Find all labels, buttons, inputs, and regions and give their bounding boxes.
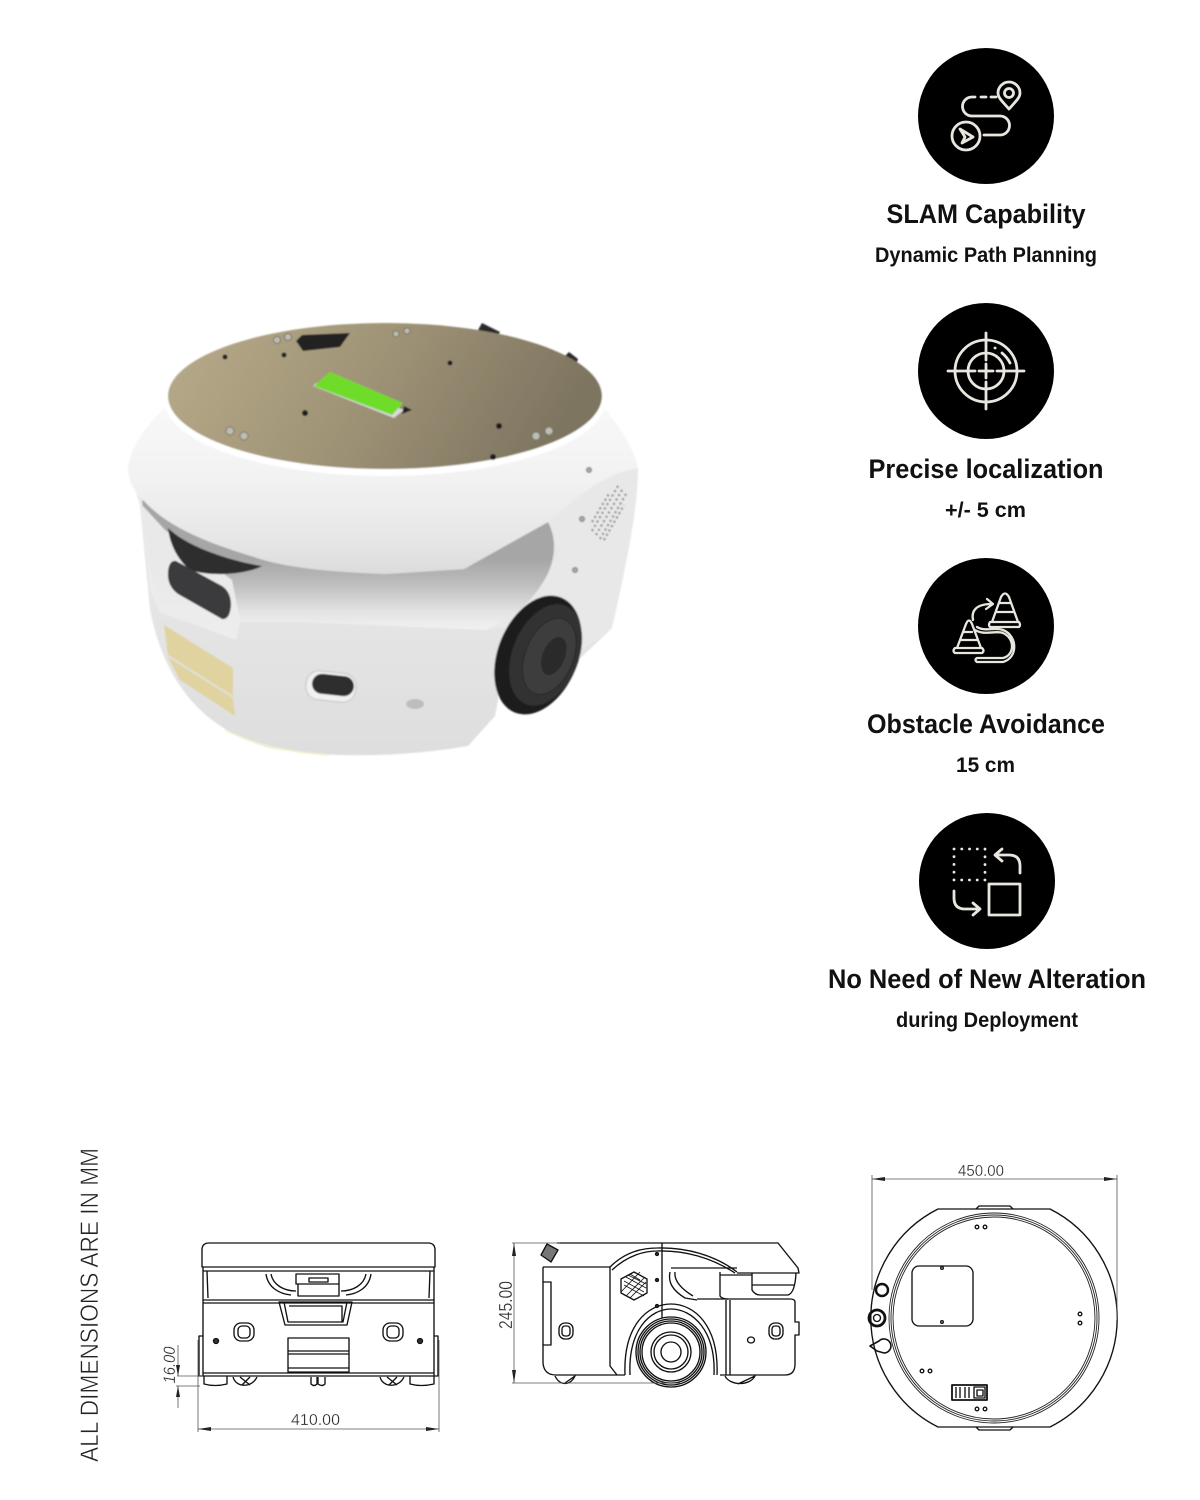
- drawing: front view: [160, 1243, 439, 1432]
- lidar: [168, 528, 262, 574]
- feature: precise localization: [868, 303, 1104, 522]
- heading: SLAM Capability: [886, 199, 1086, 229]
- dimension 410: [198, 1340, 439, 1432]
- dimension 410: 410.00: [291, 1412, 340, 1429]
- subheading: during Deployment: [896, 1009, 1078, 1032]
- front translucent cover: [142, 505, 240, 640]
- small sensor: [406, 699, 424, 709]
- top plate: [168, 323, 602, 469]
- drawing: side view: [496, 1243, 799, 1387]
- subheading: 15 cm: [956, 754, 1015, 777]
- drive wheel: [478, 583, 598, 727]
- plate holes: [222, 352, 502, 460]
- icon: cones and path: [918, 558, 1054, 694]
- dimension 450: 450.00: [958, 1163, 1004, 1180]
- icon: route with pin: [918, 48, 1054, 184]
- dimension 450: [872, 1163, 1117, 1320]
- feature: SLAM capability: [875, 48, 1097, 267]
- rear camera: [296, 333, 350, 351]
- units note: ALL DIMENSIONS ARE IN MM: [76, 1148, 104, 1462]
- dimension 245: 245.00: [496, 1281, 516, 1329]
- plate screws: [226, 328, 553, 440]
- heading: No Need of New Alteration: [828, 964, 1146, 994]
- dimension 245: [496, 1243, 680, 1383]
- rear knobs: [478, 323, 578, 368]
- feature: obstacle avoidance: [867, 558, 1105, 777]
- robot render: [128, 323, 638, 755]
- rating labels: [164, 625, 235, 716]
- heading: Obstacle Avoidance: [867, 709, 1105, 739]
- dimension 16: [160, 1345, 203, 1408]
- robot body silhouette: [128, 402, 638, 755]
- under glow: [225, 730, 330, 755]
- heading: Precise localization: [868, 454, 1104, 484]
- side screws: [572, 468, 592, 572]
- icon: relocate square: [919, 813, 1055, 949]
- speaker grille: [592, 486, 626, 540]
- sensor cavity: [142, 500, 554, 640]
- right side panel: [485, 468, 638, 652]
- dimension 16: 16.00: [160, 1346, 179, 1384]
- subheading: Dynamic Path Planning: [875, 244, 1097, 267]
- subheading: +/- 5 cm: [945, 499, 1026, 522]
- icon: crosshair target: [918, 303, 1054, 439]
- drawing: top view: [869, 1163, 1117, 1430]
- upper shroud: [128, 402, 638, 574]
- side view outline: [541, 1243, 799, 1387]
- green module: [313, 372, 412, 418]
- plate rim: [164, 324, 606, 476]
- depth camera: [168, 561, 231, 619]
- front view outline: [199, 1243, 438, 1386]
- top view outline: [869, 1206, 1117, 1430]
- front sensor window: [305, 669, 357, 704]
- feature: no new alteration: [828, 813, 1146, 1032]
